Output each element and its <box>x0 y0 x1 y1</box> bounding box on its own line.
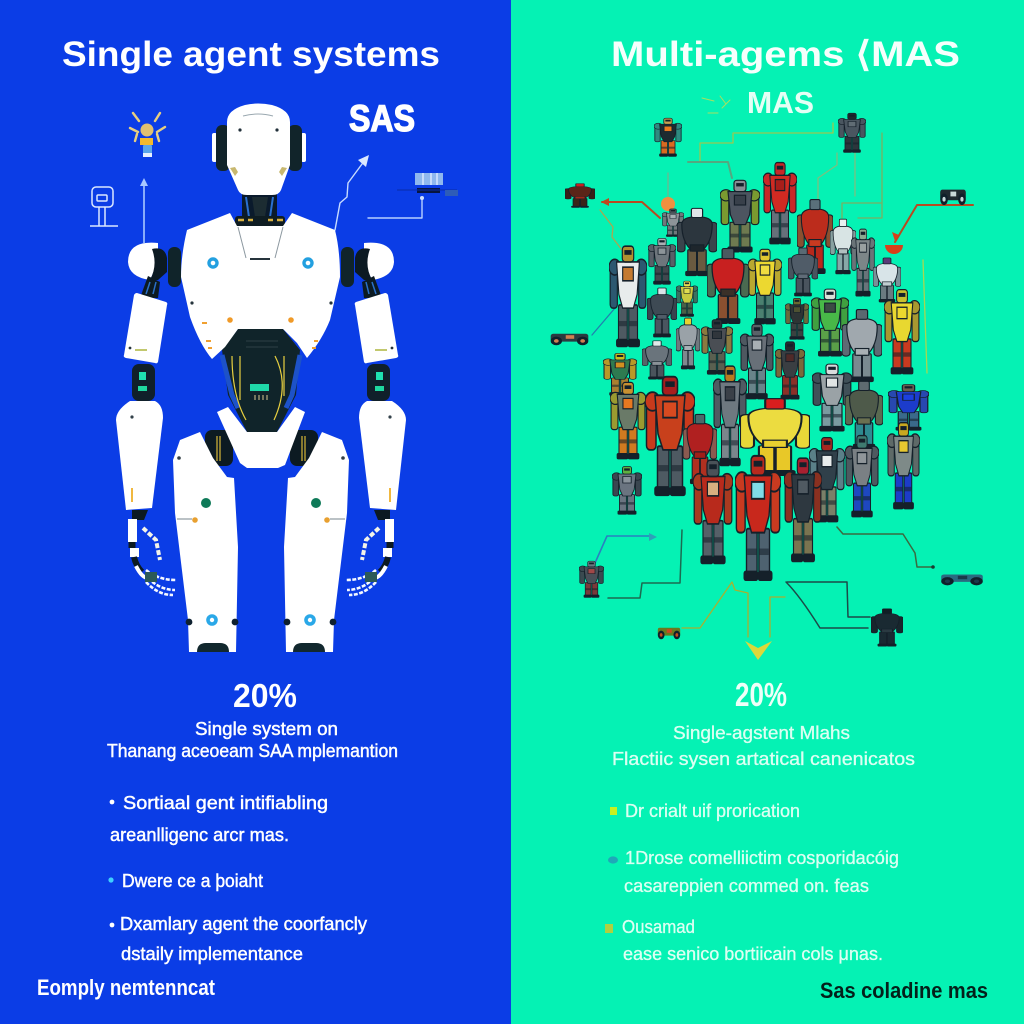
robot: yellow green <box>603 353 637 395</box>
arrow head: red to left robot <box>601 198 609 206</box>
title: single agent systems: Single agent systems <box>62 35 440 74</box>
robot: olive <box>720 180 760 252</box>
marker: orange dot <box>661 197 675 211</box>
robot: red left front <box>693 460 733 563</box>
stat: left 20%: 20% <box>233 677 297 714</box>
robot: yellow red <box>884 290 920 374</box>
bullet list: left: Sortiaal gent intifiabling <box>123 793 328 813</box>
robot: red tall <box>763 163 797 244</box>
robot left leg <box>173 432 238 652</box>
bullet list: left: dstaily implementance <box>121 944 303 964</box>
bullet list: right: casareppien commed on. feas <box>624 876 869 896</box>
robot: gray middle <box>740 324 774 399</box>
network connection lines <box>592 123 973 637</box>
stat: right 20%: 20% <box>735 676 787 713</box>
subtitle: single agent <box>612 723 915 769</box>
robot: big red orange <box>645 377 695 495</box>
icon: small robot top left <box>654 118 682 156</box>
bullet list: right: Dr crialt uif prorication <box>625 801 800 821</box>
robot: dark gray <box>788 248 818 296</box>
robot pelvis and hips <box>205 407 318 468</box>
icon: red vehicle <box>565 184 595 208</box>
robot left arm <box>116 243 181 595</box>
icon: light bulb <box>130 113 165 157</box>
bullet list: right: ease senico bortiicain cols μnas. <box>623 944 883 964</box>
robot: small green crawler <box>658 628 680 639</box>
icon: device with connector <box>368 173 458 218</box>
subtitle: single system: Single system on <box>195 719 338 739</box>
panel: multi agent background <box>511 0 1024 1024</box>
robot: olive small <box>785 298 809 339</box>
robot abdomen <box>222 329 300 432</box>
robot: dark olive <box>701 320 733 374</box>
icon: lower vehicle <box>551 334 588 345</box>
subtitle: single system <box>107 719 398 761</box>
bullet list: right: Ousamad <box>622 917 695 937</box>
robot: gray tall <box>851 229 875 296</box>
bullet list: left <box>108 793 367 964</box>
bullet list: right: 1Drose comelliictim cosporidacóig <box>625 848 899 868</box>
robot right leg <box>284 432 349 652</box>
robot: white <box>830 219 856 274</box>
heading: MAS: MAS <box>747 85 814 120</box>
robot: red arm <box>683 414 717 484</box>
robot: dark red <box>775 342 805 399</box>
robot: big red <box>707 249 749 323</box>
robot: small green head <box>612 466 642 514</box>
icon: sign post <box>90 187 118 226</box>
arrow: yellow chevron <box>745 641 772 660</box>
title: multi agents: Multi-agems ⟨MAS <box>611 35 960 74</box>
robot right arm <box>341 243 406 595</box>
robot: yellow <box>748 249 782 324</box>
arrow: from chest to SAS <box>335 155 369 230</box>
robot: big yellow <box>740 399 810 475</box>
robot: blue <box>888 384 929 430</box>
robot: gray wide <box>842 310 882 382</box>
robot: orange green <box>610 382 646 459</box>
robot: dark gray capsule <box>647 288 677 337</box>
robot crowd <box>579 163 983 646</box>
robot: white gray lower <box>812 364 852 431</box>
marker: red half dot with arrow <box>885 232 903 254</box>
subtitle: single agent: Flactiic sysen artatical canenicatos <box>612 749 915 769</box>
robot: camouflage <box>845 381 883 449</box>
robot: white gray small <box>642 341 672 379</box>
arrow: up from shoulder <box>140 178 148 243</box>
robot: yellow head small <box>676 281 698 316</box>
robot: gray blue center <box>845 436 879 517</box>
robot: white orange <box>609 246 647 346</box>
robot: gray blue right <box>887 423 920 509</box>
robot: white dark <box>809 438 845 522</box>
robot: red front center <box>735 456 781 580</box>
robot: green <box>811 289 849 356</box>
subtitle: single system: Thanang aceoeam SAA mplemantion <box>107 741 398 761</box>
arrow head: blue <box>649 533 657 541</box>
robot: dark with white head <box>677 208 717 276</box>
robot: dark front right <box>784 458 822 561</box>
robot: small lone left <box>579 561 604 597</box>
robot: gray upper <box>713 366 747 465</box>
icon: faint sparkle near MAS <box>702 96 730 113</box>
robot: dark bottom right <box>871 609 903 646</box>
footer: right: Sas coladine mas <box>820 978 988 1003</box>
footer: left: Eomply nemtenncat <box>37 975 216 1000</box>
illustration: single white robot <box>116 104 406 652</box>
robot: vehicle lower right <box>941 574 983 585</box>
robot: red dark <box>797 200 833 273</box>
robot head <box>212 104 306 227</box>
dot: end of line <box>931 565 935 569</box>
bullet list: left: Dxamlary agent the coorfancly <box>120 914 367 934</box>
panel: single agent background <box>0 0 511 1024</box>
heading: SAS: SAS <box>349 98 415 139</box>
robot torso <box>181 213 340 359</box>
robot: yellow gray capsule <box>676 318 700 369</box>
icon: dark vehicle <box>940 190 966 205</box>
bullet list: right <box>605 801 899 964</box>
robot: small gray <box>662 209 684 237</box>
bullet list: left: areanlligenc arcr mas. <box>110 825 289 845</box>
robot: purple head <box>873 258 901 302</box>
robot: gray <box>648 238 676 284</box>
subtitle: single agent: Single-agstent Mlahs <box>673 723 850 743</box>
icon: small robot top right <box>838 113 866 152</box>
bullet list: left: Dwere ce a þoiaht <box>122 871 263 891</box>
